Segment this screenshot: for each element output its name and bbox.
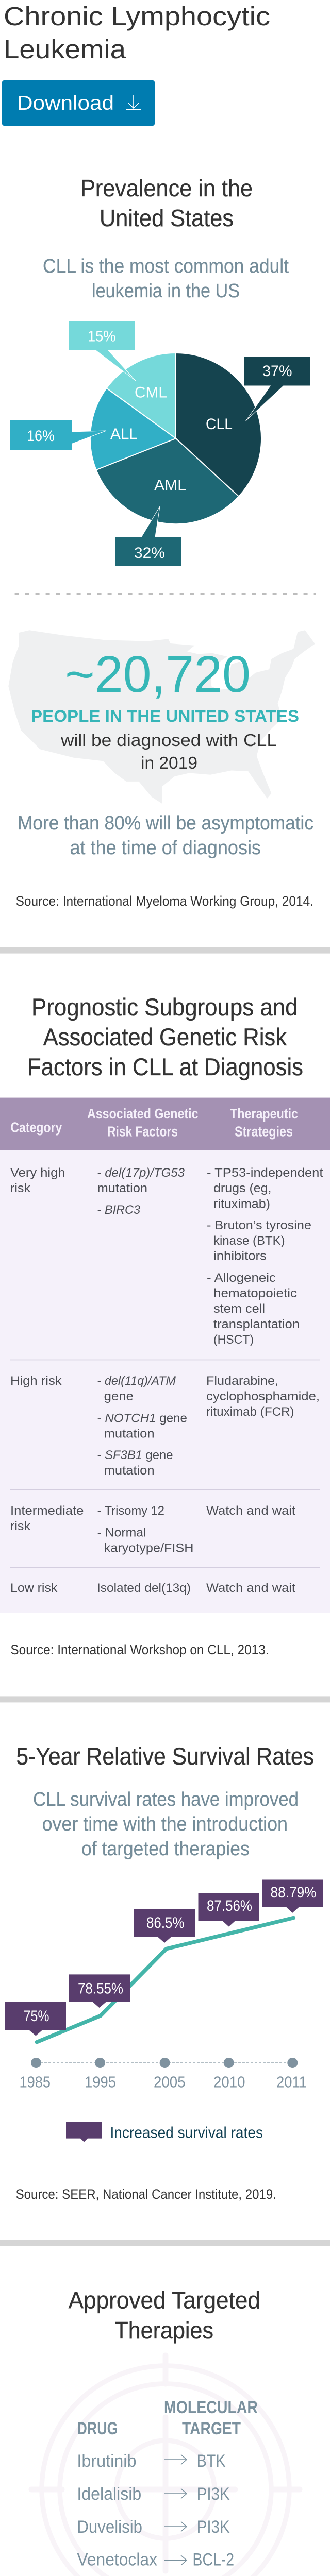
row: very high risk: - TP53-independent xyxy=(207,1166,323,1180)
table header: Therapeutic xyxy=(230,1106,298,1122)
row: very high risk: kinase (BTK) xyxy=(213,1234,285,1248)
row: very high risk: - BIRC3 xyxy=(97,1203,140,1217)
row: high risk: cyclophosphamide, xyxy=(206,1389,320,1403)
subheading: CLL most common xyxy=(43,256,289,302)
survival trend line xyxy=(37,1918,293,2042)
timeline axis: 2011 xyxy=(276,2073,307,2091)
pie label: AML: AML xyxy=(154,477,186,494)
callout: CLL 37% xyxy=(244,357,310,421)
row: Idelalisib: Idelalisib xyxy=(77,2484,141,2504)
row: Venetoclax: Venetoclax xyxy=(77,2550,157,2569)
row: Venetoclax xyxy=(77,2550,234,2569)
row: high risk xyxy=(10,1374,320,1478)
heading: prognostic subgroups: Associated Genetic Risk xyxy=(43,1023,287,1050)
subheading: survival improved: of targeted therapies xyxy=(81,1838,250,1860)
text: asymptomatic: at the time of diagnosis xyxy=(70,837,261,859)
subheading: survival improved: CLL survival rates have improved xyxy=(33,1789,299,1810)
timeline axis: 2010 xyxy=(213,2073,245,2091)
column headers xyxy=(77,2398,258,2438)
row: high risk: - del(11q)/ATM xyxy=(97,1374,176,1388)
heading: approved therapies: Approved Targeted xyxy=(69,2287,260,2314)
row: Duvelisib: Duvelisib xyxy=(77,2517,142,2537)
row: high risk: Fludarabine, xyxy=(206,1374,278,1388)
row: Idelalisib xyxy=(77,2484,230,2504)
download button xyxy=(2,80,155,126)
slice: AML 32% xyxy=(96,438,239,524)
icon: target background xyxy=(31,2355,300,2576)
row: very high risk: Very high xyxy=(10,1166,65,1180)
big number: 20,720: ~20,720 xyxy=(65,646,251,703)
row: very high risk: hematopoietic xyxy=(213,1286,297,1300)
row: Ibrutinib: BTK xyxy=(197,2451,226,2471)
callout: 88.79%: 88.79% xyxy=(270,1884,317,1901)
heading: prognostic subgroups xyxy=(27,993,303,1080)
title: Leukemia xyxy=(4,35,126,64)
row: very high risk: stem cell xyxy=(213,1302,265,1316)
column headers: DRUG xyxy=(77,2419,118,2438)
source: SEER: Source: SEER, National Cancer Institute, 2019. xyxy=(16,2187,276,2202)
heading: prevalence: United States xyxy=(100,205,234,231)
panel: drug target table xyxy=(77,2398,258,2569)
row: high risk: - SF3B1 gene xyxy=(97,1448,173,1462)
callout: 78.55% xyxy=(69,1974,130,2008)
row: very high risk: - Bruton’s tyrosine xyxy=(207,1218,311,1232)
row: intermediate risk: Intermediate xyxy=(10,1504,84,1518)
callout: CML 15%: 15% xyxy=(88,328,116,345)
callout: 86.5%: 86.5% xyxy=(146,1914,185,1931)
row: Duvelisib: PI3K xyxy=(197,2517,230,2537)
text: asymptomatic: More than 80% will be asymptomatic xyxy=(18,812,314,834)
callout: ALL 16% xyxy=(10,420,106,450)
line chart: survival xyxy=(5,1879,323,2091)
source: workshop: Source: International Workshop on CLL, 2013. xyxy=(10,1642,269,1657)
row: high risk: High risk xyxy=(10,1374,62,1388)
row: Ibrutinib xyxy=(77,2451,226,2471)
row: Duvelisib xyxy=(77,2517,230,2537)
row: low risk: Isolated del(13q) xyxy=(97,1581,191,1595)
row: low risk: Low risk xyxy=(10,1581,58,1595)
row: high risk: rituximab (FCR) xyxy=(206,1405,294,1419)
subheading: CLL most common: leukemia in the US xyxy=(92,280,240,302)
row: intermediate risk: Watch and wait xyxy=(206,1504,295,1518)
pie label: ALL: ALL xyxy=(110,426,138,443)
row: low risk xyxy=(10,1581,295,1595)
heading: prognostic subgroups: Prognostic Subgroups and xyxy=(31,993,298,1021)
pie label: CLL: CLL xyxy=(206,416,233,433)
callout: CML 15% xyxy=(69,321,136,381)
callout: 86.5% xyxy=(134,1909,195,1943)
subheading: survival improved xyxy=(33,1789,299,1860)
timeline axis xyxy=(20,2058,307,2091)
row: very high risk: - del(17p)/TG53 xyxy=(97,1166,185,1180)
table header: Category xyxy=(10,1119,62,1136)
table header xyxy=(0,1098,330,1150)
callout: AML 32%: 32% xyxy=(134,545,165,562)
row: very high risk: drugs (eg, xyxy=(213,1181,271,1195)
title: Chronic Lymphocytic xyxy=(4,2,270,31)
legend xyxy=(66,2122,263,2142)
row: low risk: Watch and wait xyxy=(206,1581,295,1595)
panel: risk table xyxy=(0,1098,330,1613)
row: Ibrutinib: Ibrutinib xyxy=(77,2451,136,2471)
slice: CLL 37% xyxy=(176,353,261,497)
row: Idelalisib: PI3K xyxy=(197,2484,230,2504)
row: intermediate risk xyxy=(10,1504,295,1555)
table header: Associated Genetic xyxy=(87,1106,198,1122)
heading: prevalence xyxy=(80,175,253,231)
row: intermediate risk: - Normal xyxy=(97,1526,146,1539)
row: very high risk: transplantation xyxy=(213,1317,300,1331)
timeline axis: 1995 xyxy=(85,2073,116,2091)
row: intermediate risk: - Trisomy 12 xyxy=(97,1504,164,1518)
text: people in the United States: PEOPLE IN THE UNITED STATES xyxy=(31,707,299,725)
timeline axis: 2005 xyxy=(154,2073,186,2091)
row: very high risk: (HSCT) xyxy=(213,1333,254,1347)
row: very high risk xyxy=(10,1166,323,1347)
column headers: TARGET xyxy=(182,2419,241,2438)
row: intermediate risk: risk xyxy=(10,1519,31,1533)
row: high risk: gene xyxy=(104,1389,134,1403)
callout: 75% xyxy=(5,2002,66,2036)
row: high risk: mutation xyxy=(104,1464,155,1478)
callout: 87.56%: 87.56% xyxy=(207,1897,252,1914)
timeline axis: 1985 xyxy=(20,2073,51,2091)
text: asymptomatic xyxy=(18,812,314,859)
row: very high risk: rituximab) xyxy=(213,1197,270,1211)
map of the United States xyxy=(8,630,315,804)
heading: prevalence: Prevalence in the xyxy=(80,175,253,201)
text: diagnosed in 2019: in 2019 xyxy=(141,753,197,772)
callout: 78.55%: 78.55% xyxy=(78,1980,123,1997)
callout: AML 32% xyxy=(116,506,182,566)
table header: Risk Factors xyxy=(107,1124,178,1140)
callout: CLL 37%: 37% xyxy=(262,363,292,380)
callout: 75%: 75% xyxy=(24,2008,50,2025)
table header: Strategies xyxy=(235,1124,293,1140)
legend: Increased survival rates xyxy=(110,2124,263,2142)
heading: prognostic subgroups: Factors in CLL at Diagnosis xyxy=(27,1053,303,1080)
row: high risk: - NOTCH1 gene xyxy=(97,1412,187,1425)
row: very high risk: - Allogeneic xyxy=(207,1271,276,1285)
slice: ALL 16% xyxy=(90,388,176,470)
row: very high risk: risk xyxy=(10,1181,31,1195)
callout: 87.56% xyxy=(198,1893,259,1927)
callout: 88.79% xyxy=(262,1879,323,1913)
row: Venetoclax: BCL-2 xyxy=(193,2550,234,2569)
row: high risk: mutation xyxy=(104,1427,155,1440)
heading: approved therapies xyxy=(69,2287,260,2344)
download button: Download xyxy=(17,92,114,114)
row: very high risk: mutation xyxy=(97,1181,147,1195)
subheading: survival improved: over time with the introduction xyxy=(42,1814,288,1835)
column headers: MOLECULAR xyxy=(164,2398,258,2417)
heading: approved therapies: Therapies xyxy=(114,2317,213,2344)
pie label: CML: CML xyxy=(135,384,167,401)
text: diagnosed in 2019: will be diagnosed with CLL xyxy=(60,731,277,750)
text: diagnosed in 2019 xyxy=(60,731,277,772)
callout: ALL 16%: 16% xyxy=(27,428,55,445)
row: intermediate risk: karyotype/FISH xyxy=(104,1541,194,1555)
slice: CML 15% xyxy=(107,353,176,438)
title xyxy=(4,2,270,64)
subheading: CLL most common: CLL is the most common adult xyxy=(43,256,289,277)
pie chart xyxy=(90,353,261,524)
row: very high risk: inhibitors xyxy=(213,1249,267,1263)
